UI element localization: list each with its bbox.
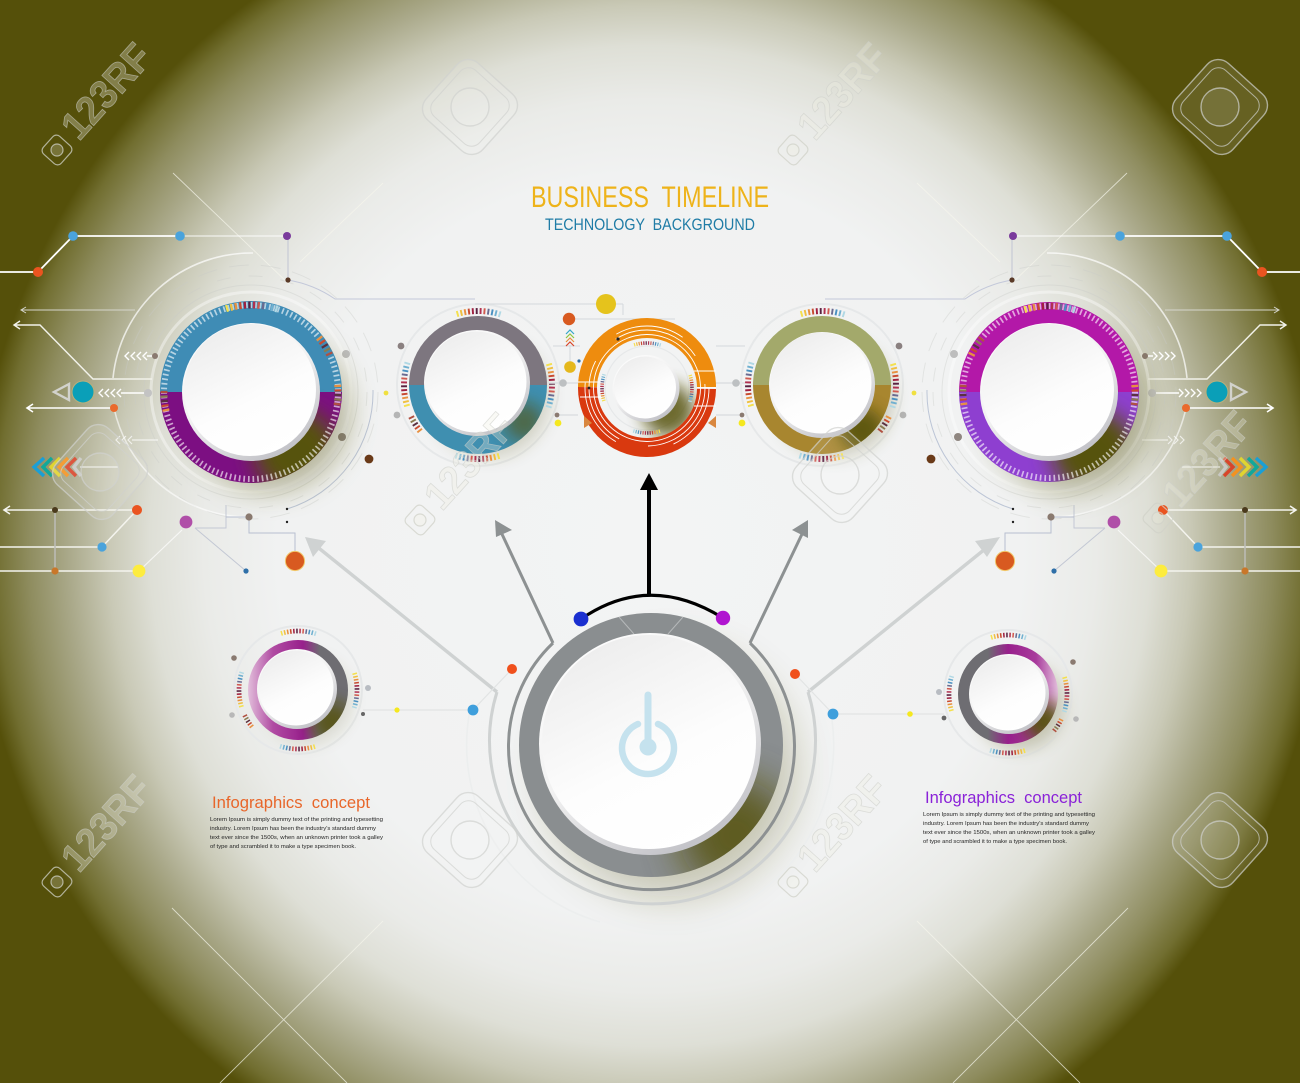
ring: medium left	[397, 304, 559, 466]
faint diagonal lines	[172, 173, 1128, 1083]
text block: right concept: of type and scrambled it to make a type specimen book.	[923, 839, 1067, 845]
gear outline rings	[124, 265, 378, 519]
text block: left concept: of type and scrambled it to make a type specimen book.	[210, 844, 356, 850]
icon: power symbol	[622, 695, 674, 774]
connector: small right	[790, 659, 1079, 722]
text block: left concept	[210, 793, 383, 850]
lower left circuit	[4, 506, 137, 514]
ring: medium right	[741, 304, 903, 466]
watermark pattern: 123RF	[1154, 403, 1262, 516]
title	[531, 181, 769, 234]
watermark pattern: 123RF	[789, 35, 897, 148]
center connectors	[475, 294, 745, 426]
text block: right concept: industry. Lorem Ipsum has been the industry's standard dummy	[923, 821, 1089, 827]
arrow: upper right	[750, 520, 808, 643]
text block: right concept: Infographics concept	[925, 788, 1082, 807]
ring: small left	[234, 626, 362, 754]
arrow: center black	[574, 473, 730, 626]
watermark pattern	[40, 35, 1274, 899]
text block: left concept: Infographics concept	[212, 793, 370, 812]
grey nodes around the ring	[342, 350, 350, 358]
coloured chevrons	[34, 458, 118, 476]
main ring outer arcs	[467, 643, 834, 922]
ring: large right	[959, 302, 1148, 494]
ring: small right	[944, 630, 1072, 758]
top circuit line	[0, 236, 180, 272]
ring: center orange and red	[578, 318, 716, 457]
arrow: far left	[305, 537, 497, 692]
connector: small left	[229, 655, 517, 718]
watermark pattern: 123RF	[53, 35, 161, 148]
thin arrow	[21, 307, 135, 313]
ring: main power button	[519, 613, 791, 891]
orange arrow	[27, 404, 114, 412]
arrow: upper left	[495, 520, 553, 643]
title: BUSINESS TIMELINE	[531, 181, 769, 214]
bent arrow	[14, 321, 152, 379]
circuit network: left	[0, 231, 475, 577]
text block: left concept: text ever since the 1500s, when an unknown printer took a galley	[210, 835, 383, 841]
text block: left concept: industry. Lorem Ipsum has been the industry's standard dummy	[210, 826, 376, 832]
watermark pattern: 123RF	[789, 767, 897, 880]
outer arcs	[113, 253, 253, 378]
text block: left concept: Lorem Ipsum is simply dummy text of the printing and typesetting	[210, 817, 383, 823]
text block: right concept	[923, 788, 1095, 845]
watermark pattern: 123RF	[53, 767, 161, 880]
circuit network: right (mirror)	[825, 231, 1300, 577]
arrow: far right	[808, 537, 1000, 692]
ring: large left	[160, 301, 350, 494]
teal node	[72, 381, 94, 403]
text block: right concept: text ever since the 1500s, when an unknown printer took a galley	[923, 830, 1095, 836]
watermark pattern: 123RF	[416, 405, 524, 518]
text block: right concept: Lorem Ipsum is simply dummy text of the printing and typesetting	[923, 812, 1095, 818]
white chevrons	[99, 389, 148, 397]
title: TECHNOLOGY BACKGROUND	[545, 215, 755, 234]
